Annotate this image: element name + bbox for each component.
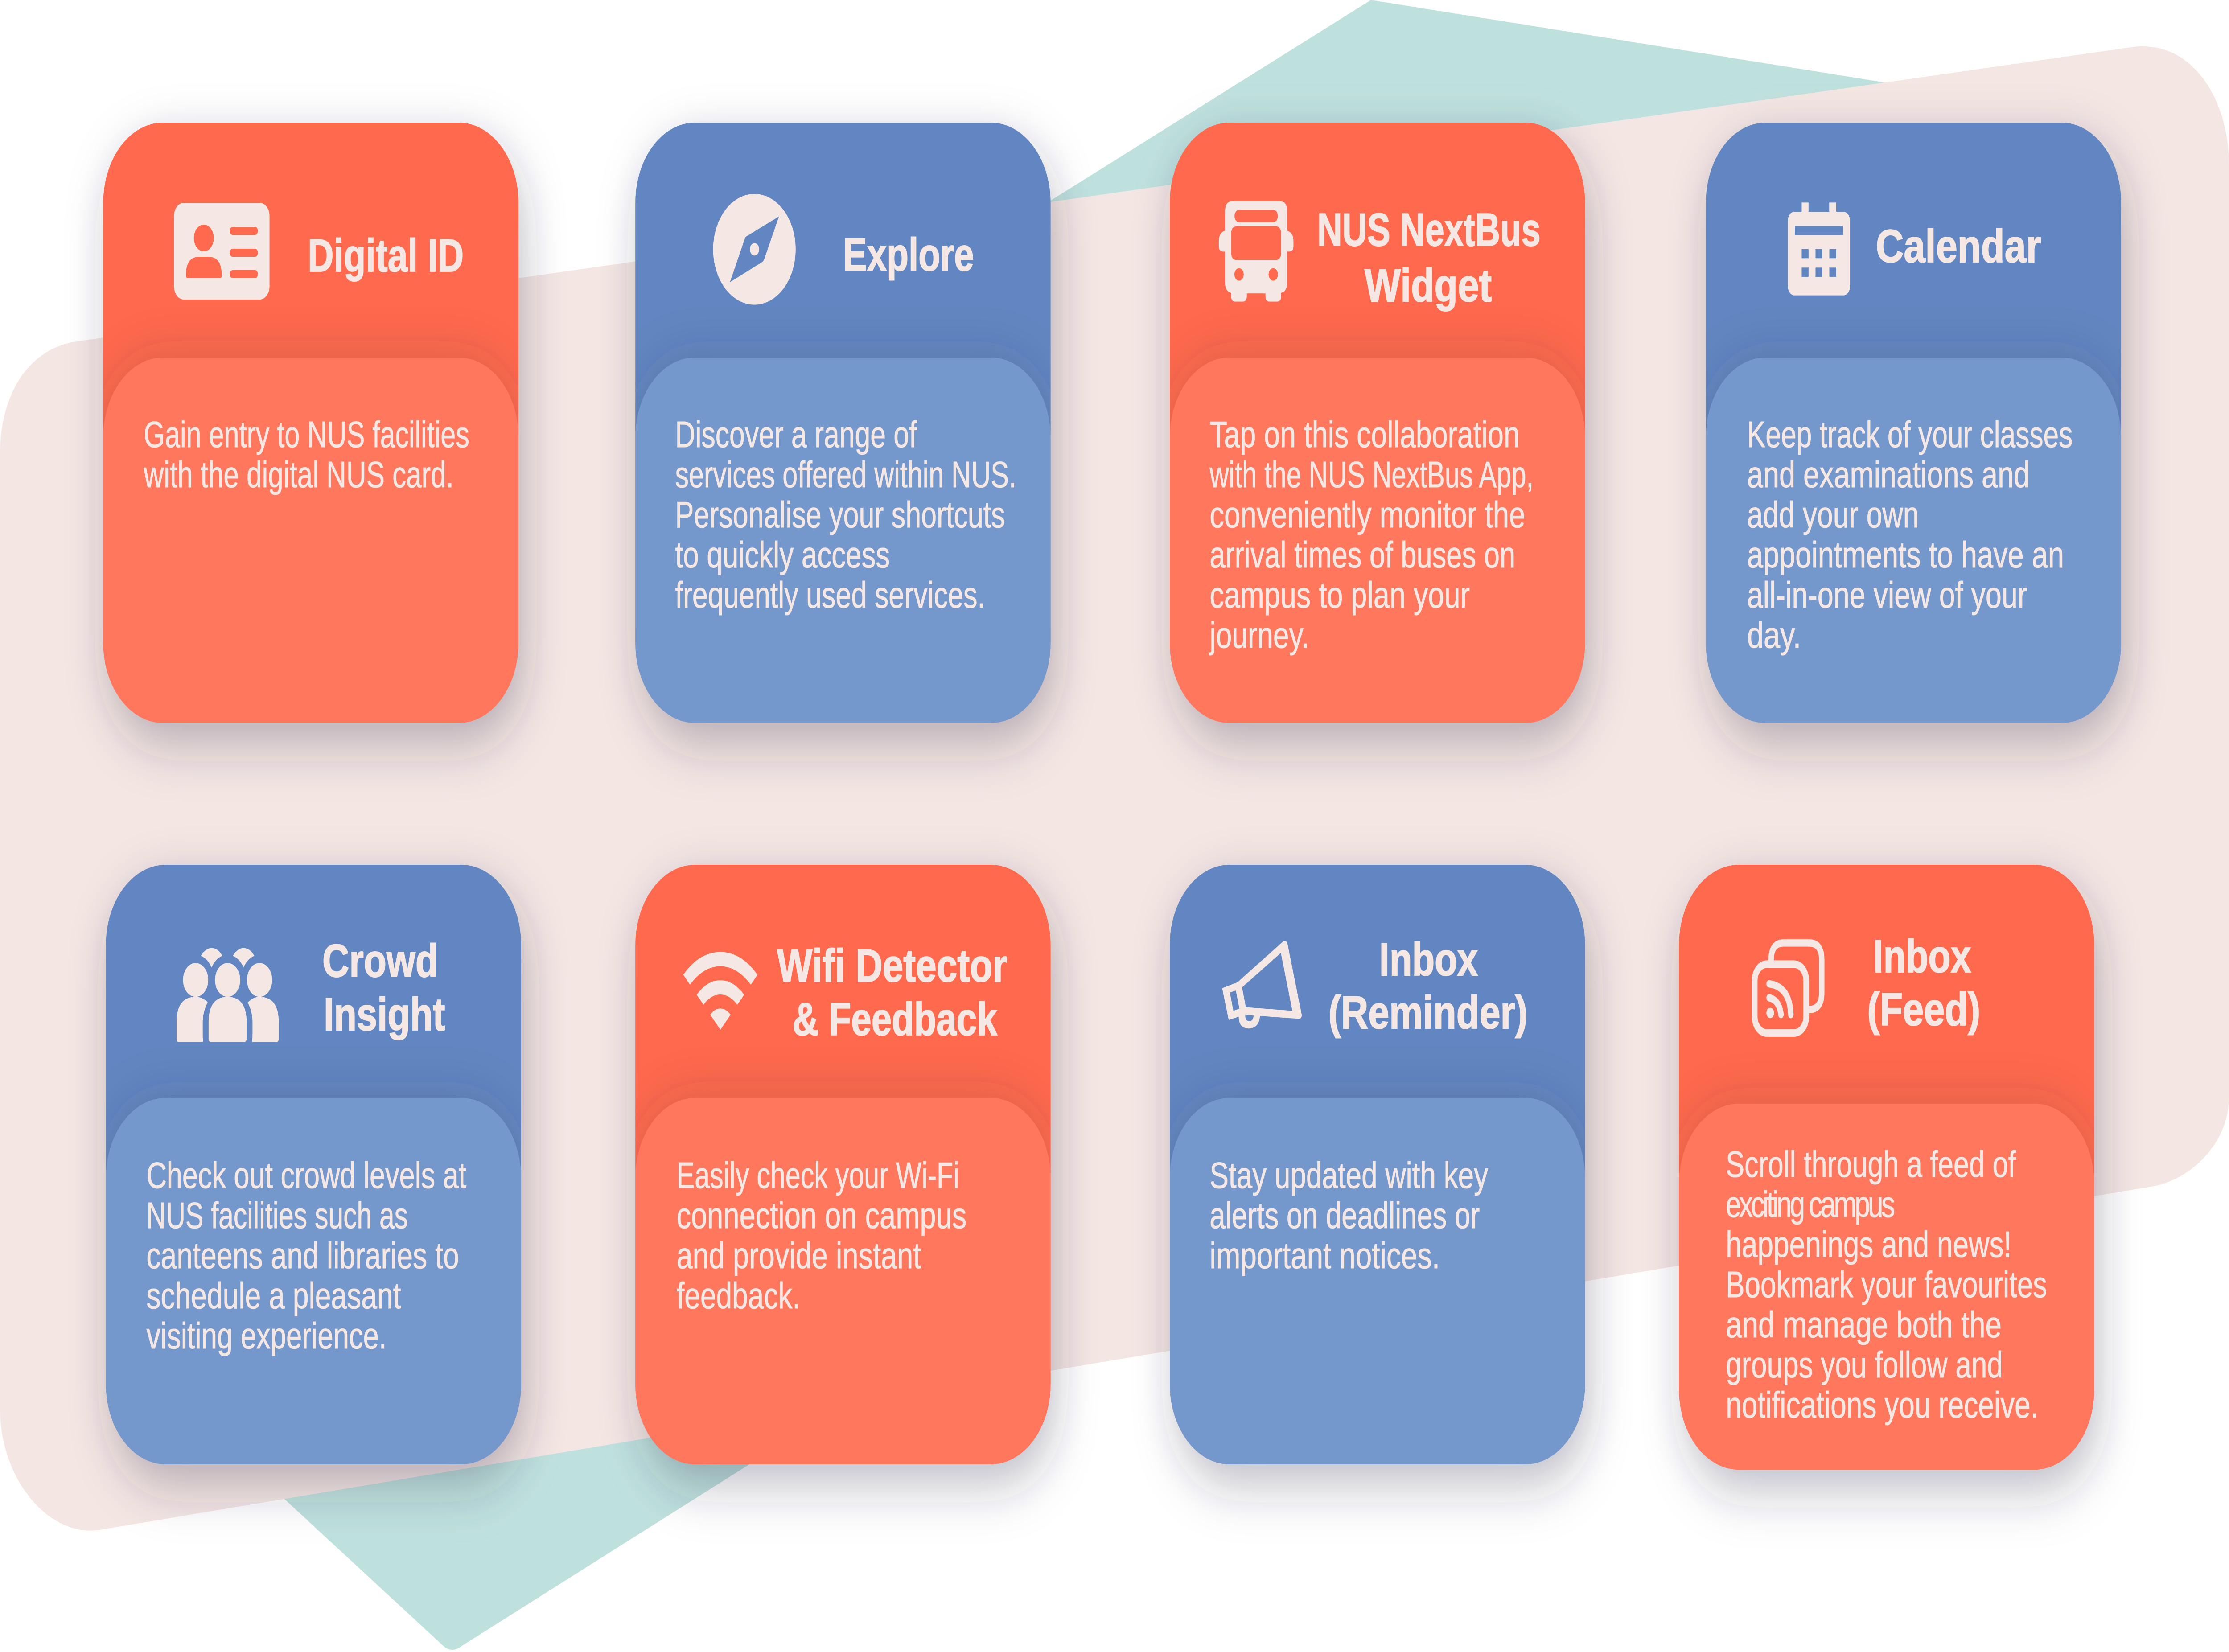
heading: Inbox — [1379, 934, 1478, 986]
description: all-in-one view of your — [1747, 574, 2027, 616]
heading: Calendar — [1876, 221, 2041, 272]
description: Tap on this collaboration — [1209, 414, 1520, 455]
panel: Crowd Insight — [106, 865, 521, 1499]
description: NUS facilities such as — [146, 1195, 408, 1236]
icon: megaphone — [1222, 941, 1302, 1028]
panel: Calendar — [1706, 123, 2121, 759]
background: teal triangle bottom — [232, 1337, 764, 1650]
description: to quickly access — [675, 534, 890, 575]
background: teal triangle top — [996, 0, 1899, 235]
description — [1209, 414, 1534, 656]
description: day. — [1747, 614, 1801, 656]
heading — [1328, 934, 1528, 1039]
description — [1726, 1143, 2047, 1426]
description: journey. — [1209, 614, 1309, 656]
heading: (Feed) — [1867, 984, 1980, 1036]
icon: wifi — [683, 952, 757, 1030]
description — [146, 1155, 466, 1356]
icon: rss feeds — [1755, 943, 1822, 1033]
heading: Explore — [843, 229, 974, 281]
description: connection on campus — [676, 1195, 966, 1236]
heading: Crowd — [322, 935, 438, 987]
description: Gain entry to NUS facilities — [144, 414, 469, 455]
description: and examinations and — [1747, 454, 2030, 495]
description: services offered within NUS. — [675, 454, 1016, 495]
heading — [777, 940, 1007, 1045]
icon: calendar — [1788, 202, 1850, 296]
description: canteens and libraries to — [146, 1235, 459, 1276]
description: Keep track of your classes — [1747, 414, 2073, 455]
description: feedback. — [676, 1275, 800, 1316]
icon: ID card — [174, 203, 270, 300]
description: groups you follow and — [1726, 1344, 2003, 1385]
heading: Wifi Detector — [777, 940, 1007, 992]
description: appointments to have an — [1747, 534, 2064, 575]
description: frequently used services. — [675, 574, 985, 616]
icon: crowd — [177, 948, 279, 1042]
description: Personalise your shortcuts — [675, 494, 1005, 535]
description — [1209, 1155, 1488, 1276]
description: Bookmark your favourites — [1726, 1264, 2047, 1305]
description: and provide instant — [676, 1235, 921, 1276]
heading — [322, 935, 445, 1040]
description: Check out crowd levels at — [146, 1155, 466, 1196]
description: exciting campus — [1726, 1184, 1895, 1225]
description: campus to plan your — [1209, 574, 1470, 616]
heading — [1867, 931, 1980, 1036]
description: Stay updated with key — [1209, 1155, 1488, 1196]
description: conveniently monitor the — [1209, 494, 1525, 535]
panel: Wifi Detector & Feedback — [635, 865, 1051, 1499]
heading: & Feedback — [792, 994, 998, 1045]
heading: Insight — [324, 989, 445, 1040]
panel: Explore — [635, 123, 1051, 759]
description: schedule a pleasant — [146, 1275, 401, 1316]
description: with the NUS NextBus App, — [1209, 454, 1534, 495]
description — [1747, 414, 2073, 656]
icon: bus — [1219, 201, 1293, 302]
description: add your own — [1747, 494, 1919, 535]
description: alerts on deadlines or — [1209, 1195, 1480, 1236]
description: Discover a range of — [675, 414, 917, 455]
heading: Inbox — [1873, 931, 1971, 982]
heading: Digital ID — [308, 230, 464, 282]
panel: Digital ID — [103, 123, 518, 759]
description: with the digital NUS card. — [144, 454, 454, 495]
icon: compass — [713, 194, 796, 305]
description: visiting experience. — [146, 1315, 387, 1356]
panel: NUS NextBus Widget — [1170, 123, 1585, 759]
description — [144, 414, 469, 495]
description — [675, 414, 1016, 616]
heading — [1317, 204, 1541, 312]
description: important notices. — [1209, 1235, 1440, 1276]
description: arrival times of buses on — [1209, 534, 1515, 575]
description — [676, 1155, 966, 1316]
panel: Inbox (Reminder) — [1170, 865, 1585, 1499]
description: Scroll through a feed of — [1726, 1143, 2016, 1185]
description: notifications you receive. — [1726, 1384, 2039, 1426]
panel: Inbox (Feed) — [1679, 865, 2094, 1505]
description: Easily check your Wi-Fi — [676, 1155, 959, 1196]
description: happenings and news! — [1726, 1224, 2011, 1265]
description: and manage both the — [1726, 1304, 2002, 1345]
heading: Widget — [1365, 260, 1492, 312]
heading: (Reminder) — [1328, 987, 1528, 1039]
heading: NUS NextBus — [1317, 204, 1541, 256]
